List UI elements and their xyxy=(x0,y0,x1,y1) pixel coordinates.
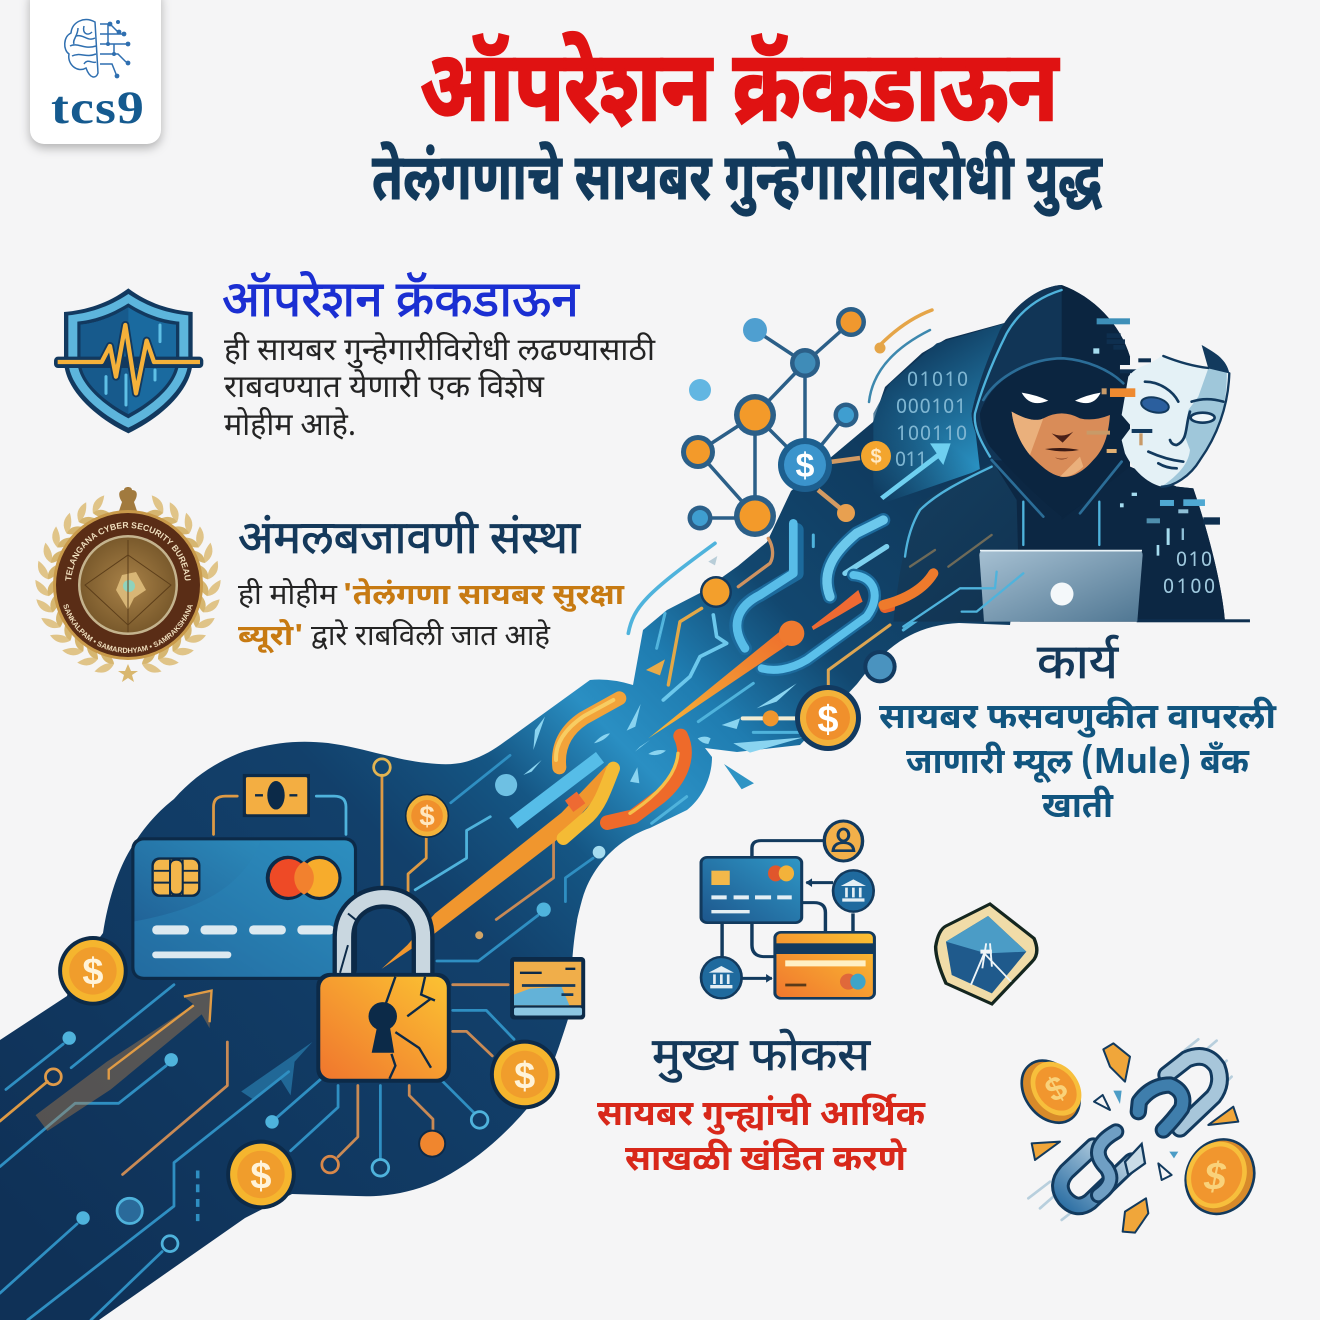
coin: $ xyxy=(82,952,103,994)
hub dollar node: $ xyxy=(796,447,815,485)
subtitle: तेलंगणाचे सायबर गुन्हेगारीविरोधी युद्ध xyxy=(372,141,1103,226)
chain link: light blue bar xyxy=(513,757,600,823)
sleeve highlights xyxy=(910,535,992,567)
function description xyxy=(879,696,1277,832)
card chip xyxy=(151,857,200,897)
card network logo xyxy=(266,856,342,900)
emblem: Telangana Cyber Security Bureau seal xyxy=(35,487,221,682)
account card xyxy=(701,857,802,923)
main focus description xyxy=(597,1093,926,1185)
coin: $ xyxy=(250,1155,272,1197)
blue node xyxy=(863,650,897,683)
lower circuit section xyxy=(0,755,607,1320)
glitch pixels xyxy=(1093,318,1157,373)
coin xyxy=(490,1040,559,1109)
small coin: $ xyxy=(419,801,435,832)
small coin xyxy=(406,795,448,837)
chain highlight xyxy=(630,753,678,813)
face left highlight xyxy=(1012,412,1083,477)
orange-red chain pieces xyxy=(812,590,863,630)
circuit nodes xyxy=(45,759,605,1252)
agency lines: ही मोहीम xyxy=(238,578,338,616)
coin xyxy=(226,1140,296,1209)
main focus description: साखळी खंडित करणे xyxy=(625,1138,907,1185)
credit card xyxy=(131,837,357,980)
function description: सायबर फसवणुकीत वापरली xyxy=(879,696,1277,743)
stray line near network xyxy=(869,330,930,402)
logo wordmark: tcs9 xyxy=(51,82,145,134)
emblem: Telangana Cyber Security Bureau seal: TELANGANA CYBER SECURITY BUREAU xyxy=(65,522,191,581)
laptop xyxy=(979,551,1143,622)
stray arrows near network xyxy=(880,310,932,345)
orange chain end near hacker xyxy=(885,583,922,607)
function description: खाती xyxy=(1042,785,1114,832)
eyes xyxy=(1022,393,1101,403)
icon: cracked shield badge xyxy=(936,904,1037,1004)
dark band shape xyxy=(0,322,1040,1320)
network links xyxy=(698,322,851,518)
hood interior xyxy=(980,358,1128,517)
ground line xyxy=(1137,619,1250,622)
binary digits on hoodie xyxy=(1163,549,1215,602)
coin connector xyxy=(743,710,797,726)
title: ऑपरेशन क्रॅकडाऊन xyxy=(420,31,1059,160)
coin: $ xyxy=(1203,1154,1227,1198)
binary digits behind hacker: 100110 xyxy=(896,423,967,449)
chain link: upper orange xyxy=(559,698,619,767)
hood left half xyxy=(972,285,1062,520)
operation description xyxy=(222,271,656,448)
wires and highlights xyxy=(628,535,920,823)
icon: brain circuit xyxy=(65,20,130,78)
laptop logo xyxy=(1050,582,1074,606)
main focus description: सायबर गुन्ह्यांची आर्थिक xyxy=(597,1093,926,1140)
chain link: red-orange xyxy=(607,736,684,823)
lower link end xyxy=(1125,1144,1145,1175)
national emblem crest xyxy=(119,487,137,511)
person node xyxy=(824,821,863,861)
large coin: $ xyxy=(817,699,839,741)
body text xyxy=(224,332,656,448)
body text: ही सायबर गुन्हेगारीविरोधी लढण्यासाठी xyxy=(224,332,656,373)
agency lines: 'तेलंगणा सायबर सुरक्षा xyxy=(342,577,624,616)
shards xyxy=(1032,1043,1238,1233)
icon: broken chain with coins xyxy=(1010,1039,1266,1233)
coin xyxy=(1010,1049,1092,1134)
chain link: yellow xyxy=(563,768,613,838)
glitch pixels over mask xyxy=(1087,388,1220,556)
binary digits behind hacker: 01010 xyxy=(907,369,968,395)
blue chain links xyxy=(736,520,887,670)
body text: राबवण्यात येणारी एक विशेष xyxy=(224,369,545,410)
torso xyxy=(992,460,1225,622)
light shards xyxy=(523,556,803,812)
hood dark half xyxy=(1062,285,1130,520)
heading: enforcement agency: अंमलबजावणी संस्था xyxy=(238,511,581,572)
orange node xyxy=(700,576,732,608)
arrow xyxy=(880,443,951,500)
arrow head dot xyxy=(874,342,886,354)
money note xyxy=(243,774,310,817)
face xyxy=(1012,412,1110,477)
orange diagonal xyxy=(382,765,607,969)
coin xyxy=(1174,1128,1266,1225)
function block xyxy=(879,634,1277,832)
binary backdrop panel xyxy=(873,323,1005,507)
small coin xyxy=(861,441,891,471)
body text: मोहीम आहे. xyxy=(224,407,356,448)
agency lines: द्वारे राबविली जात आहे xyxy=(311,619,551,657)
function description: जाणारी म्यूल (Mule) बँक xyxy=(906,741,1250,788)
middle section: fractured chain xyxy=(513,520,922,838)
hub dollar node xyxy=(778,438,832,492)
orange bank card xyxy=(775,932,874,998)
theatre mask xyxy=(1122,345,1229,487)
binary digits on hoodie: 010 xyxy=(1176,549,1212,575)
agency lines: ब्यूरो' xyxy=(238,619,304,657)
main focus block xyxy=(597,1028,926,1185)
arrows xyxy=(36,991,312,1131)
hood outlines xyxy=(905,290,1099,557)
circuit traces xyxy=(0,755,593,1320)
padlock xyxy=(316,897,451,1083)
laptop circuit lines xyxy=(903,572,1023,627)
mini bank card xyxy=(510,957,585,1019)
icon: pulse shield xyxy=(54,288,203,433)
hoodie body xyxy=(893,285,1225,622)
binary digits behind hacker xyxy=(895,369,968,475)
motion streaks xyxy=(1028,1039,1232,1220)
logo card xyxy=(30,0,161,144)
lower chain link xyxy=(1060,1132,1132,1206)
orange diagonal bar with node xyxy=(648,621,804,738)
heading: operation crackdown: ऑपरेशन क्रॅकडाऊन xyxy=(222,271,580,337)
coin xyxy=(58,936,128,1006)
heading: main focus: मुख्य फोकस xyxy=(652,1028,871,1089)
bank node xyxy=(701,957,742,998)
binary digits behind hacker: 000101 xyxy=(896,396,966,422)
connector lines xyxy=(818,458,860,513)
binary digits behind hacker: 011 xyxy=(895,449,927,475)
coin: $ xyxy=(514,1055,535,1097)
chain highlight xyxy=(556,700,613,760)
nose and mouth xyxy=(1045,432,1079,459)
large coin xyxy=(795,685,861,751)
heading: function: कार्य xyxy=(1037,634,1119,698)
sleeve orange chain xyxy=(883,573,933,605)
small coin: $ xyxy=(870,446,882,468)
enforcement agency text xyxy=(238,511,624,657)
icon: bank account network xyxy=(701,821,874,998)
network graph xyxy=(681,307,891,751)
binary digits on hoodie: 0100 xyxy=(1163,576,1215,602)
emblem: Telangana Cyber Security Bureau seal: SANKALPAM • SAMARDHYAM • SAMRAKSHANA xyxy=(64,604,193,653)
bank node xyxy=(833,870,874,912)
agency lines xyxy=(238,577,624,657)
hood inner edge xyxy=(983,358,1123,517)
illustration: data band from card to hacker xyxy=(0,285,1250,1320)
wreath xyxy=(35,495,221,682)
upper chain link xyxy=(1138,1056,1220,1130)
hacker figure xyxy=(880,285,1250,627)
coin: $ xyxy=(1039,1068,1074,1110)
